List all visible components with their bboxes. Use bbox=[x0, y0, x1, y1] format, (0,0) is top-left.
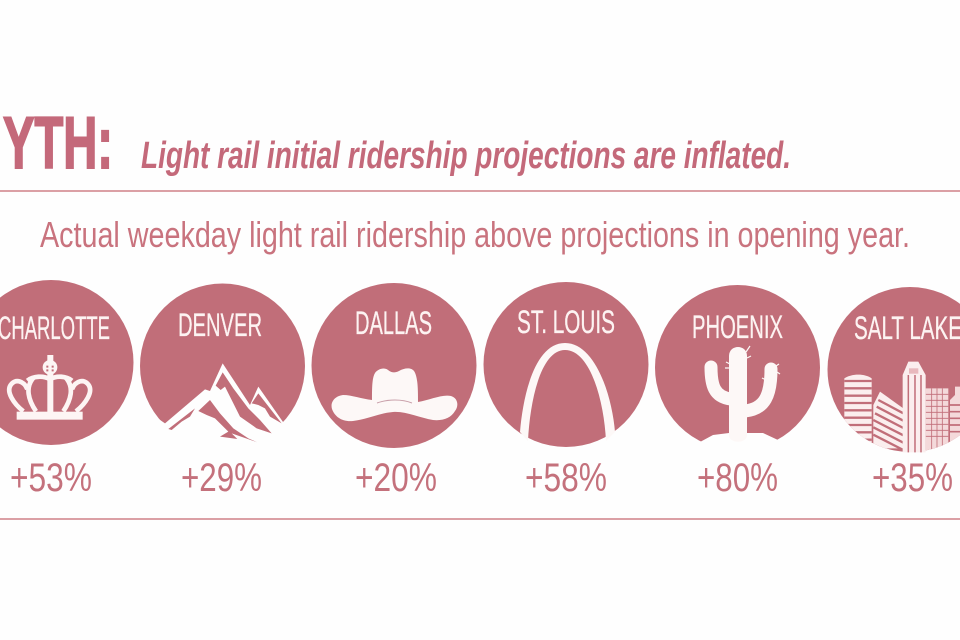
city: Dallas bbox=[312, 283, 476, 500]
city: Charlotte bbox=[0, 280, 134, 500]
city: Phoenix: PHOENIX bbox=[692, 309, 783, 345]
icon: cactus bbox=[680, 346, 800, 470]
value: +53% bbox=[10, 456, 92, 500]
city: Denver: DENVER bbox=[178, 307, 262, 343]
value: +29% bbox=[181, 456, 262, 500]
city: Salt Lake bbox=[828, 287, 960, 500]
panel: cities bbox=[0, 280, 960, 500]
icon: skyline bbox=[844, 362, 960, 455]
icon: mountains bbox=[143, 363, 303, 455]
city: Phoenix bbox=[655, 285, 820, 500]
city: Charlotte: CHARLOTTE bbox=[0, 310, 110, 346]
city: St. Louis bbox=[484, 282, 648, 500]
value: +58% bbox=[525, 456, 607, 500]
icon: gateway arch bbox=[520, 343, 615, 441]
heading: myth: YTH: bbox=[3, 103, 113, 184]
city: Denver bbox=[140, 284, 305, 500]
icon: cowboy hat bbox=[332, 368, 457, 421]
icon: crown bbox=[9, 355, 90, 420]
infographic canvas bbox=[0, 116, 960, 520]
city: St. Louis: ST. LOUIS bbox=[517, 304, 615, 340]
value: +80% bbox=[697, 456, 778, 500]
value: +20% bbox=[355, 456, 437, 500]
city: Dallas: DALLAS bbox=[355, 305, 432, 341]
